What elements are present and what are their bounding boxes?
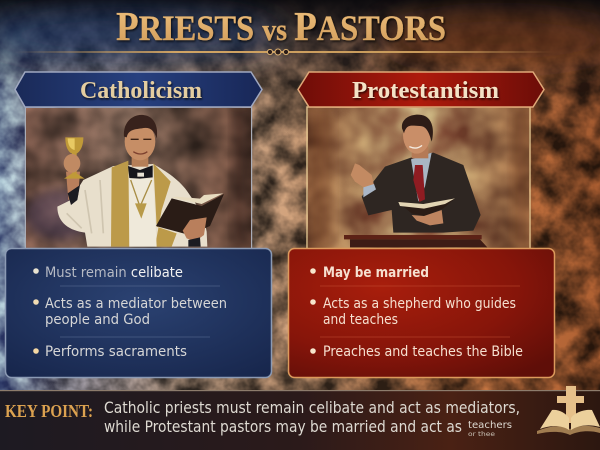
tie bbox=[413, 165, 425, 202]
lower hand bbox=[412, 210, 443, 225]
illustration: priest with chalice and book bbox=[57, 115, 224, 247]
panel: Protestantism photo bbox=[307, 107, 530, 249]
neck bbox=[412, 147, 428, 158]
bullet: shepherd: Acts as a shepherd who guides bbox=[323, 296, 516, 312]
panel: Catholicism points bbox=[6, 248, 272, 378]
neck bbox=[132, 153, 148, 167]
key point text: Catholic priests must remain celibate and act as mediators, bbox=[104, 398, 520, 417]
bullet: shepherd: and teaches bbox=[323, 312, 398, 328]
open book bbox=[156, 194, 224, 235]
key point text: while Protestant pastors may be married and act as bbox=[104, 417, 462, 436]
suit bbox=[362, 153, 481, 233]
chain and pendant bbox=[131, 180, 152, 207]
chalice bbox=[64, 137, 85, 179]
key point text: or thee bbox=[468, 431, 495, 438]
hand holding book bbox=[183, 217, 207, 242]
face bbox=[403, 116, 430, 154]
bullet: shepherd bbox=[310, 296, 516, 328]
pulpit bbox=[344, 235, 482, 239]
key point band bbox=[0, 386, 600, 450]
face bbox=[125, 123, 155, 160]
bullet: must remain celibate: Must remain celibate bbox=[45, 265, 183, 281]
illustration: pastor at pulpit with Bible bbox=[344, 115, 487, 247]
alb front bbox=[129, 179, 157, 247]
bullet: sacraments: Performs sacraments bbox=[45, 344, 187, 360]
bullet: preaches: Preaches and teaches the Bible bbox=[323, 344, 523, 360]
banner: Protestantism: Protestantism bbox=[352, 78, 499, 104]
collar bbox=[128, 165, 153, 179]
title divider ornament bbox=[15, 49, 553, 55]
key point label: KEY POINT: bbox=[5, 401, 93, 421]
open Bible bbox=[398, 198, 455, 216]
bullet: mediator bbox=[33, 296, 227, 328]
key point text: teachers bbox=[468, 420, 512, 431]
icon: cross and open book bbox=[537, 386, 600, 435]
panel: Protestantism points bbox=[288, 248, 554, 378]
key point text bbox=[104, 398, 520, 438]
bullet: may be married: May be married bbox=[323, 265, 429, 281]
raised hand bbox=[351, 163, 374, 188]
panel: Catholicism photo bbox=[25, 107, 252, 249]
robe bbox=[57, 164, 207, 247]
title: PRIESTS vs PASTORS bbox=[116, 3, 446, 49]
forearm and cuff bbox=[66, 172, 80, 200]
hand holding chalice bbox=[64, 154, 80, 173]
banner: Catholicism: Catholicism bbox=[80, 78, 202, 104]
banner: Catholicism bbox=[15, 72, 262, 107]
stole bbox=[111, 161, 177, 247]
shirt bbox=[411, 153, 432, 202]
bullet: mediator: people and God bbox=[45, 312, 150, 328]
bullet: mediator: Acts as a mediator between bbox=[45, 296, 227, 312]
banner: Protestantism bbox=[298, 72, 544, 107]
